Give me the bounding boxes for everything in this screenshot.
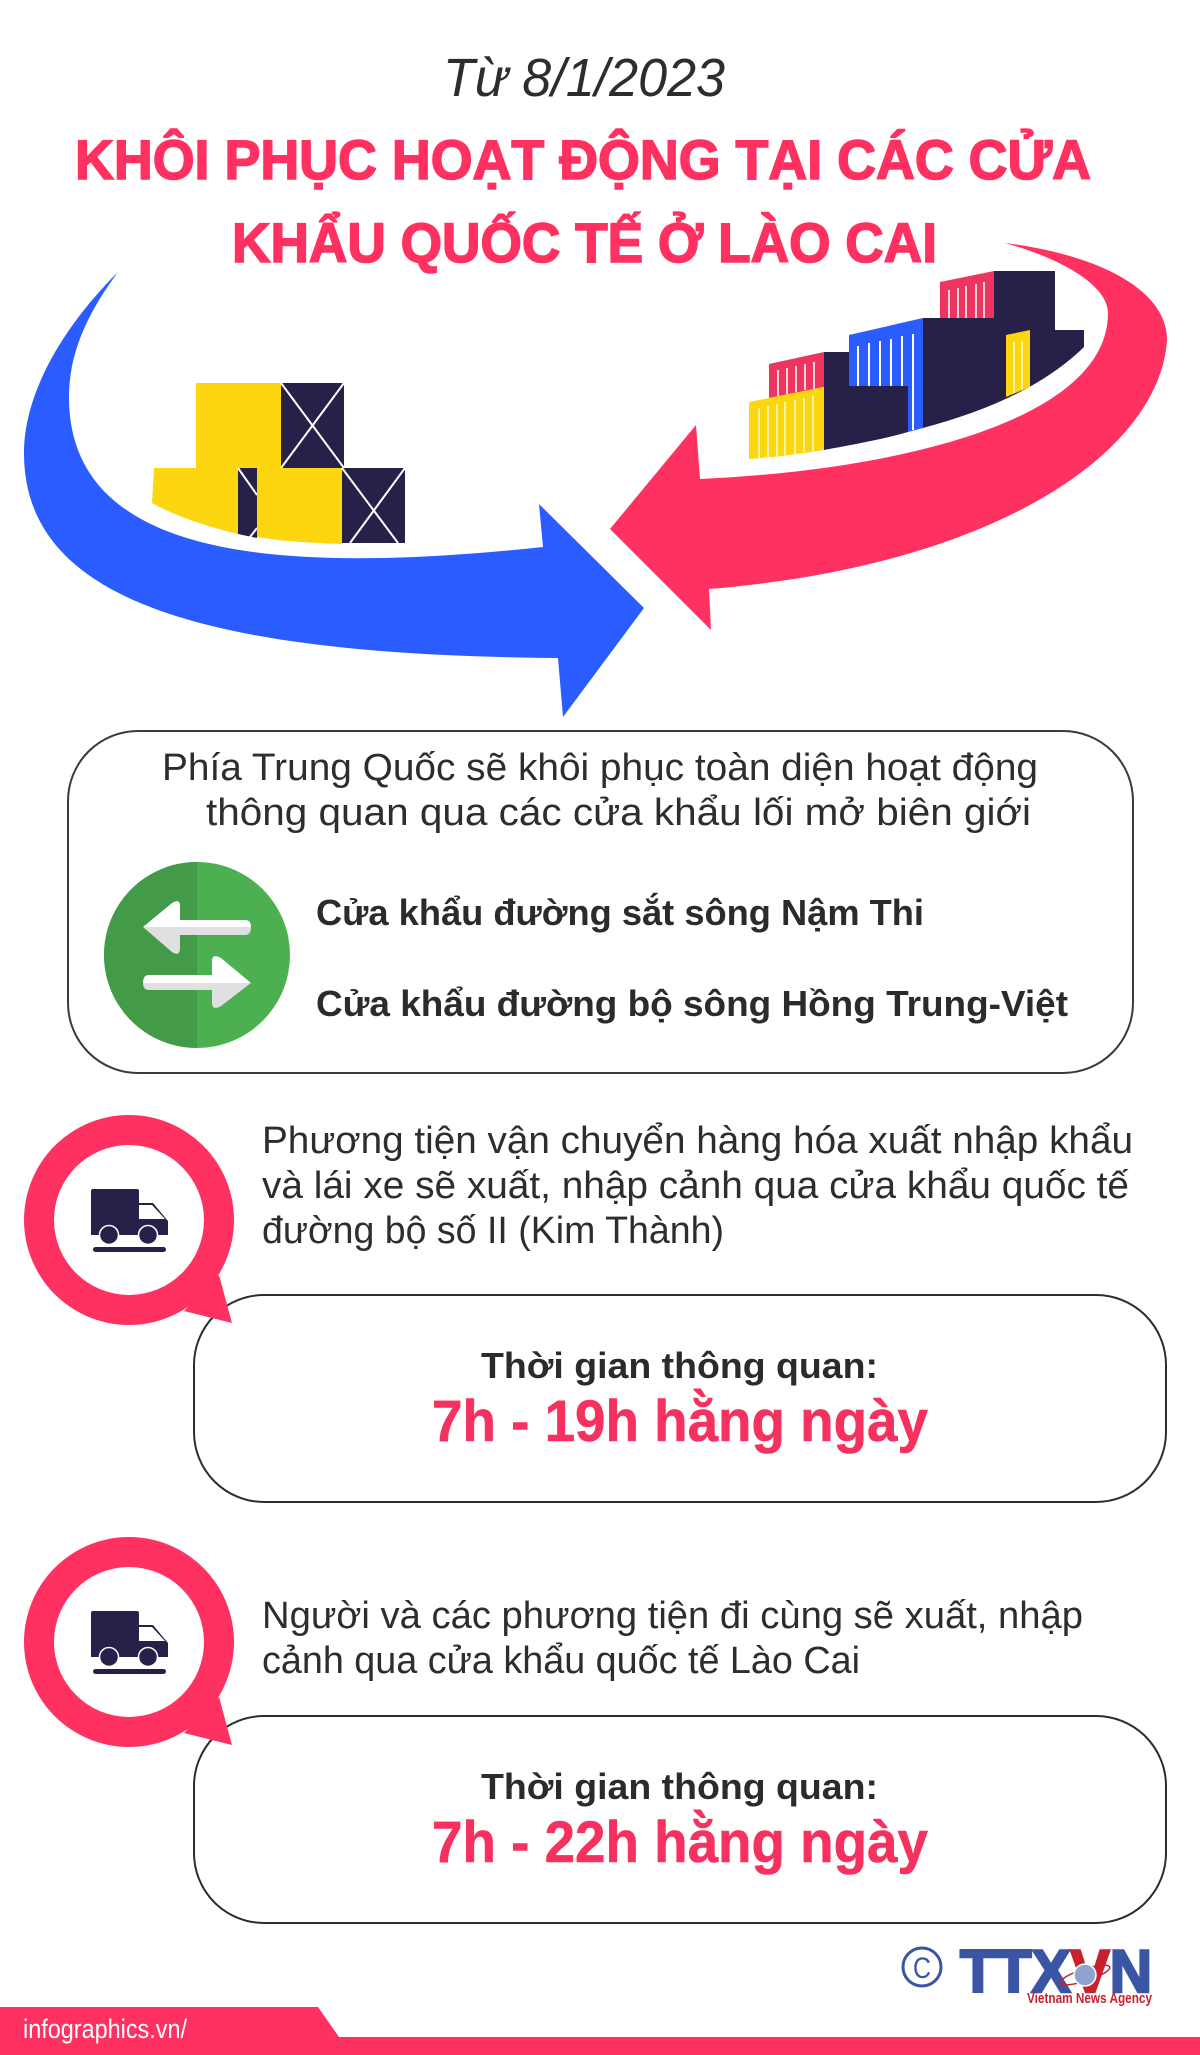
callout icon: truck 2 bbox=[24, 1537, 234, 1747]
text: people and accompanying vehicles: cảnh qua cửa khẩu quốc tế Lào Cai bbox=[262, 1640, 860, 1682]
illustration: yellow and navy boxes bbox=[152, 383, 405, 544]
text: people and accompanying vehicles bbox=[262, 1595, 1083, 1682]
illustration: shipping containers bbox=[749, 271, 1084, 459]
text: freight vehicles: Phương tiện vận chuyển hàng hóa xuất nhập khẩu bbox=[262, 1120, 1133, 1162]
text: freight vehicles bbox=[262, 1120, 1133, 1252]
panel text: intro: thông quan qua các cửa khẩu lối mở biên giới bbox=[206, 792, 1031, 834]
gate name: railway: Cửa khẩu đường sắt sông Nậm Thi bbox=[316, 891, 924, 933]
title: KHÔI PHỤC HOẠT ĐỘNG TẠI CÁC CỬA bbox=[75, 128, 1091, 191]
title bbox=[75, 128, 1091, 274]
panel text: intro: Phía Trung Quốc sẽ khôi phục toàn diện hoạt động bbox=[162, 747, 1038, 789]
time box 1 bbox=[194, 1295, 1166, 1502]
text: freight vehicles: và lái xe sẽ xuất, nhập cảnh qua cửa khẩu quốc tế bbox=[262, 1165, 1129, 1207]
date heading: Từ 8/1/2023 bbox=[443, 48, 725, 108]
callout icon: truck 1 bbox=[24, 1115, 234, 1325]
time box 2 bbox=[194, 1716, 1166, 1923]
logo: copyright and TTXVN: TTXVN bbox=[960, 1938, 1152, 2005]
panel: Chinese side border gates bbox=[68, 731, 1133, 1073]
title: KHẨU QUỐC TẾ Ở LÀO CAI bbox=[232, 211, 937, 274]
icon: green exchange arrows bbox=[104, 862, 290, 1048]
time label 2: Thời gian thông quan: bbox=[481, 1766, 878, 1807]
logo: copyright and TTXVN: Vietnam News Agency bbox=[1027, 1990, 1153, 2007]
text: people and accompanying vehicles: Người và các phương tiện đi cùng sẽ xuất, nhập bbox=[262, 1595, 1083, 1637]
arrow: red bbox=[610, 243, 1167, 630]
gate name: road: Cửa khẩu đường bộ sông Hồng Trung-Việt bbox=[316, 983, 1068, 1024]
footer source: infographics.vn/ bbox=[23, 2014, 187, 2044]
panel text: intro bbox=[162, 747, 1038, 834]
footer band bbox=[0, 2007, 1200, 2055]
time label 1: Thời gian thông quan: bbox=[481, 1345, 878, 1386]
time value 1: 7h - 19h hằng ngày bbox=[432, 1389, 928, 1454]
arrow: blue bbox=[24, 272, 644, 717]
time value 2: 7h - 22h hằng ngày bbox=[432, 1810, 928, 1875]
logo: copyright and TTXVN: C bbox=[913, 1952, 931, 1985]
text: freight vehicles: đường bộ số II (Kim Thành) bbox=[262, 1210, 724, 1252]
